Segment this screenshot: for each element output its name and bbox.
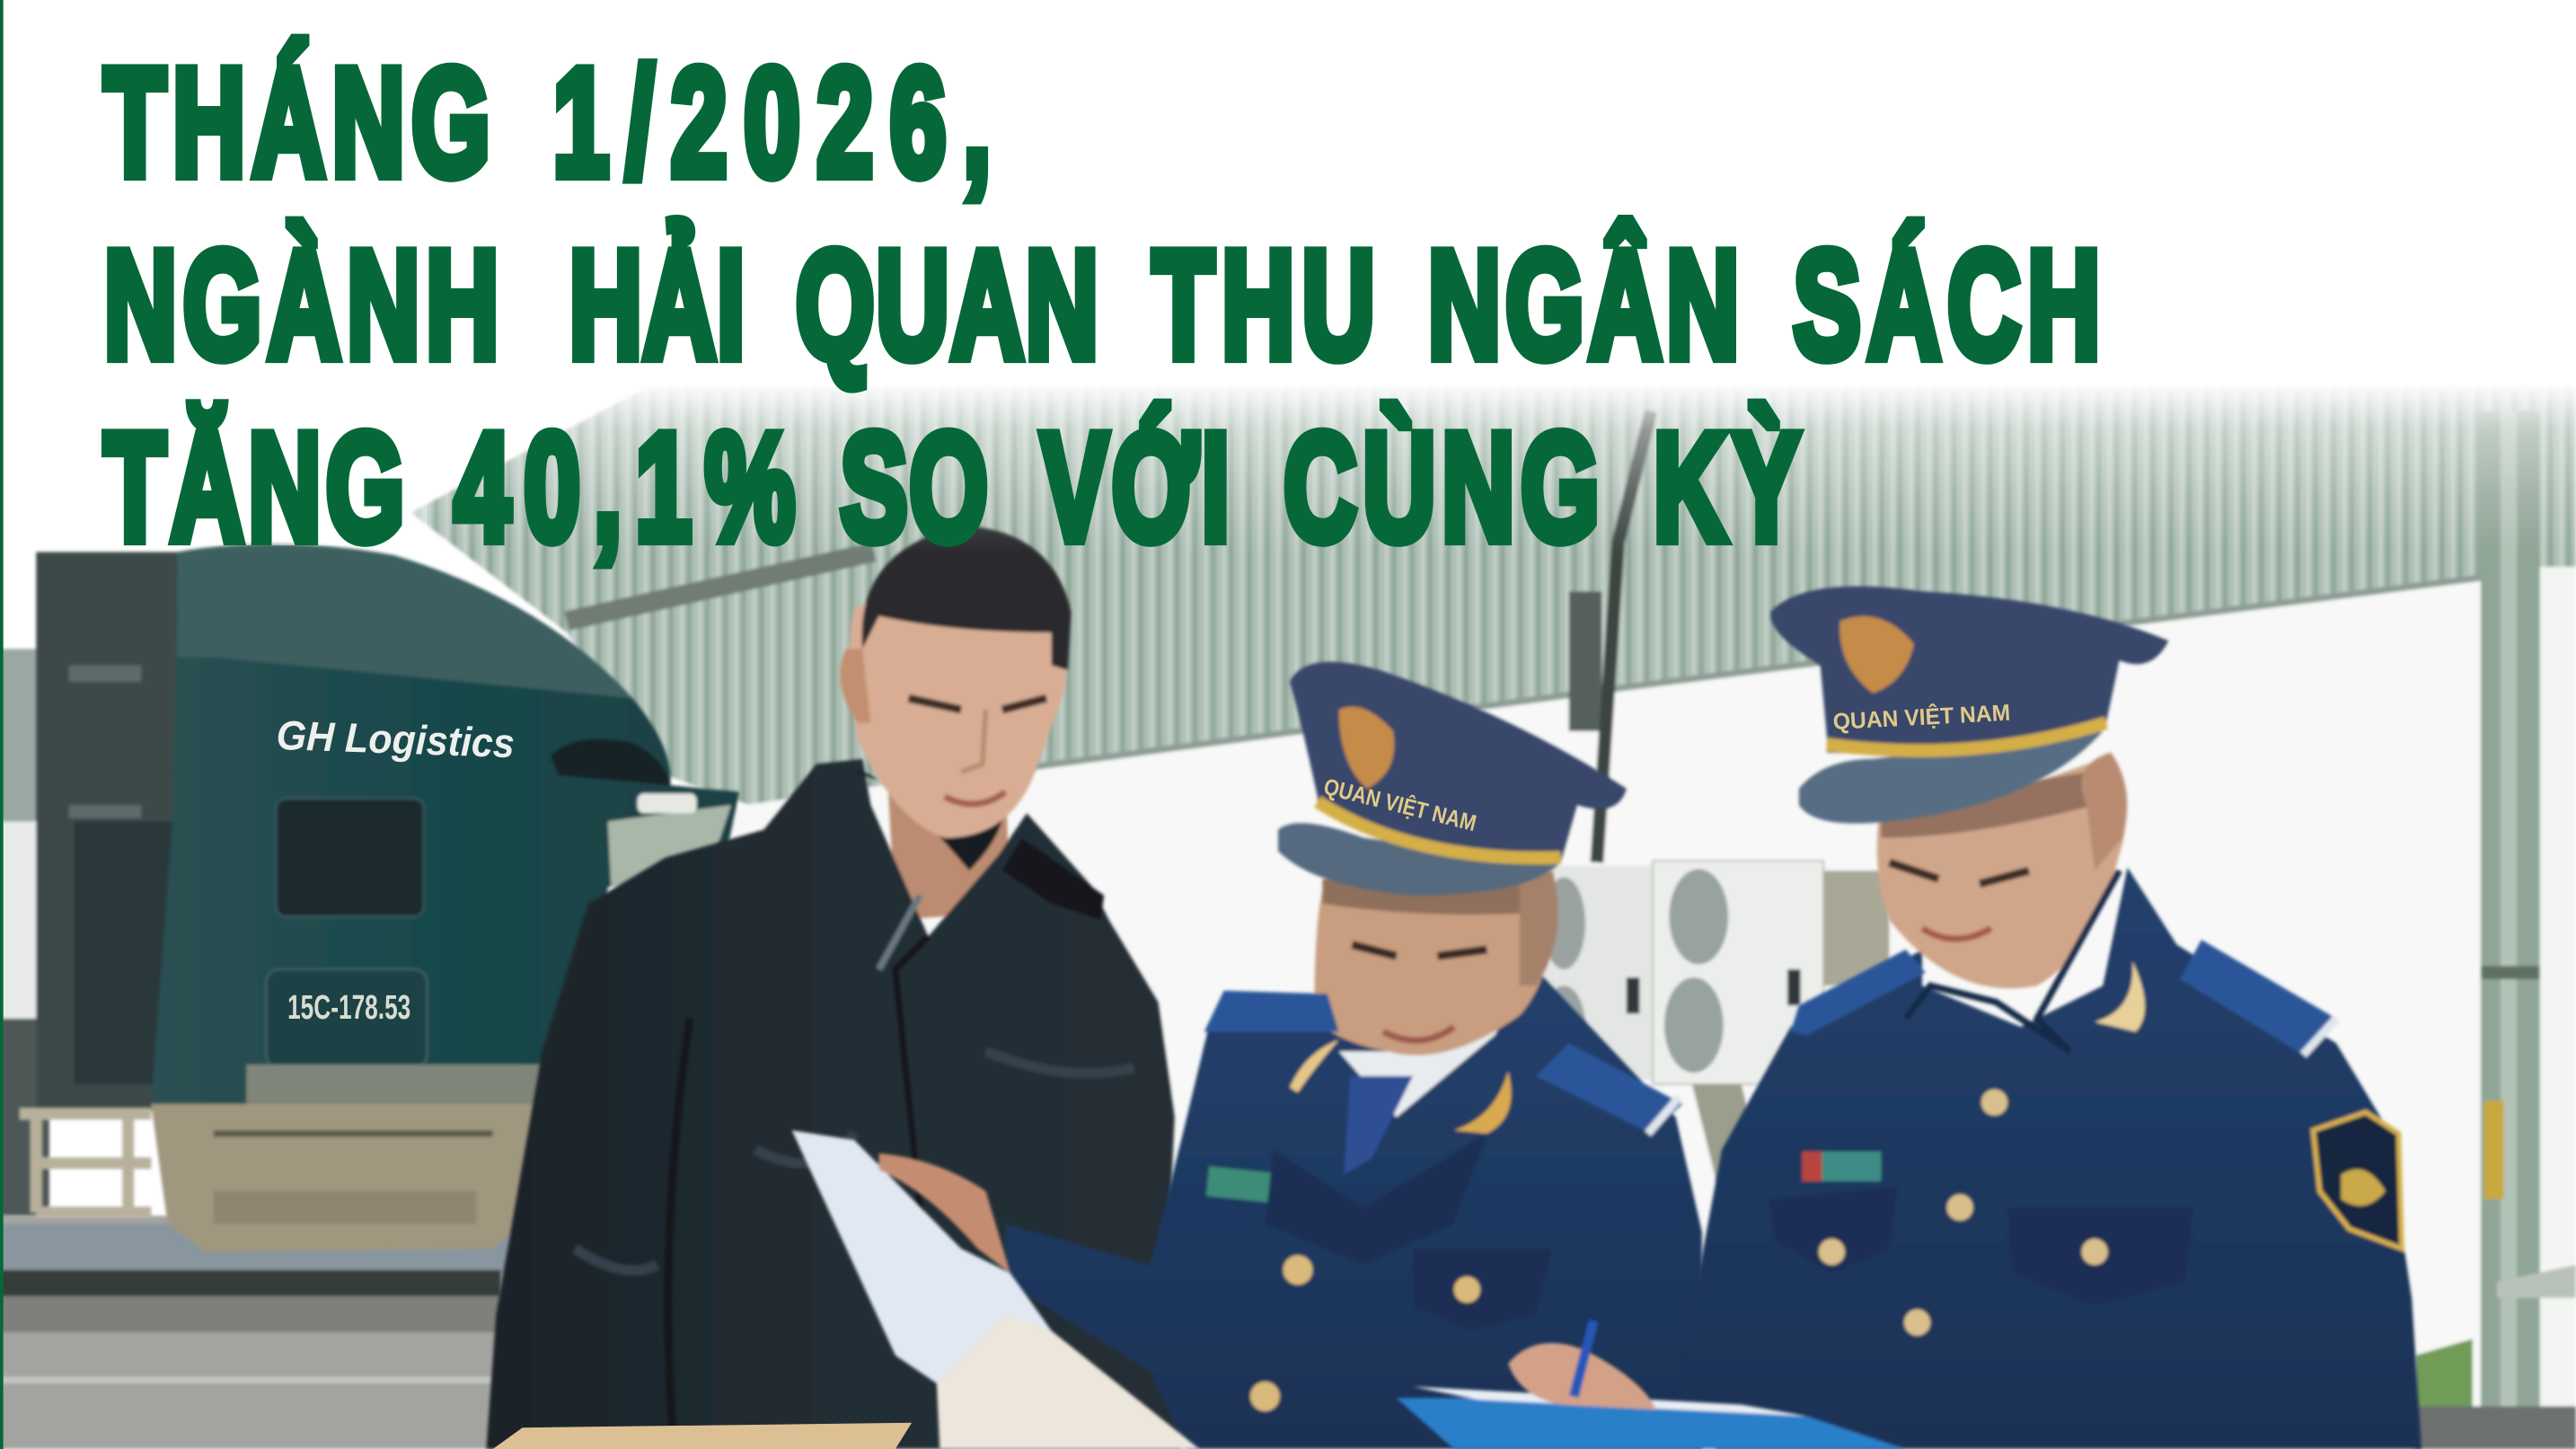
- officer left cap text: QUAN VIỆT NAM: [1321, 773, 1479, 836]
- title line 2: SÁCH: [1794, 219, 2100, 390]
- photo: customs officers inspecting goods beside a truck: [0, 386, 2576, 1449]
- title line 2: NGÀNH: [104, 219, 498, 390]
- title line 3: TĂNG: [104, 402, 404, 572]
- background warehouse: [0, 386, 2576, 1449]
- title line 3: [104, 402, 1800, 572]
- box: [493, 1423, 912, 1449]
- title line 3: CÙNG: [1284, 402, 1600, 572]
- epaulettes right: [1791, 940, 2336, 1055]
- title: [104, 37, 2100, 572]
- writing hand, pen and blue folder: [1397, 1321, 1906, 1449]
- title line 3: VỚI: [1041, 402, 1230, 572]
- title line 3: 40,1%: [454, 402, 795, 572]
- ground: [0, 1215, 525, 1449]
- officer left: [1005, 870, 1702, 1449]
- title line 1: 1/2026,: [553, 37, 991, 208]
- epaulettes left: [1204, 991, 1682, 1134]
- title line 1: [104, 37, 991, 208]
- title line 2: [104, 219, 2100, 390]
- title line 2: NGÂN: [1428, 219, 1739, 390]
- licence plate: 15C-178.53: [287, 988, 410, 1027]
- truck lettering: GH Logistics: [276, 712, 516, 766]
- officer right cap: [1770, 587, 2168, 824]
- title line 3: SO: [841, 402, 988, 572]
- title line 1: THÁNG: [104, 37, 490, 208]
- title line 2: QUAN: [796, 219, 1098, 390]
- man in black jacket: [486, 526, 1183, 1449]
- package held by officer: [792, 1130, 1199, 1449]
- AC units: [1541, 861, 1889, 1183]
- white fade behind title: [0, 381, 2576, 553]
- title line 2: THU: [1152, 219, 1375, 390]
- title line 2: HẢI: [569, 219, 745, 390]
- left green edge: [0, 0, 4, 1449]
- officer right cap text: QUAN VIỆT NAM: [1832, 699, 2011, 735]
- officer right: [1676, 753, 2422, 1449]
- shoulder badge: [2313, 1112, 2402, 1249]
- title line 3: KỲ: [1654, 402, 1800, 572]
- officer left cap: [1278, 662, 1627, 896]
- truck: [0, 543, 739, 1252]
- left fade: [0, 381, 428, 545]
